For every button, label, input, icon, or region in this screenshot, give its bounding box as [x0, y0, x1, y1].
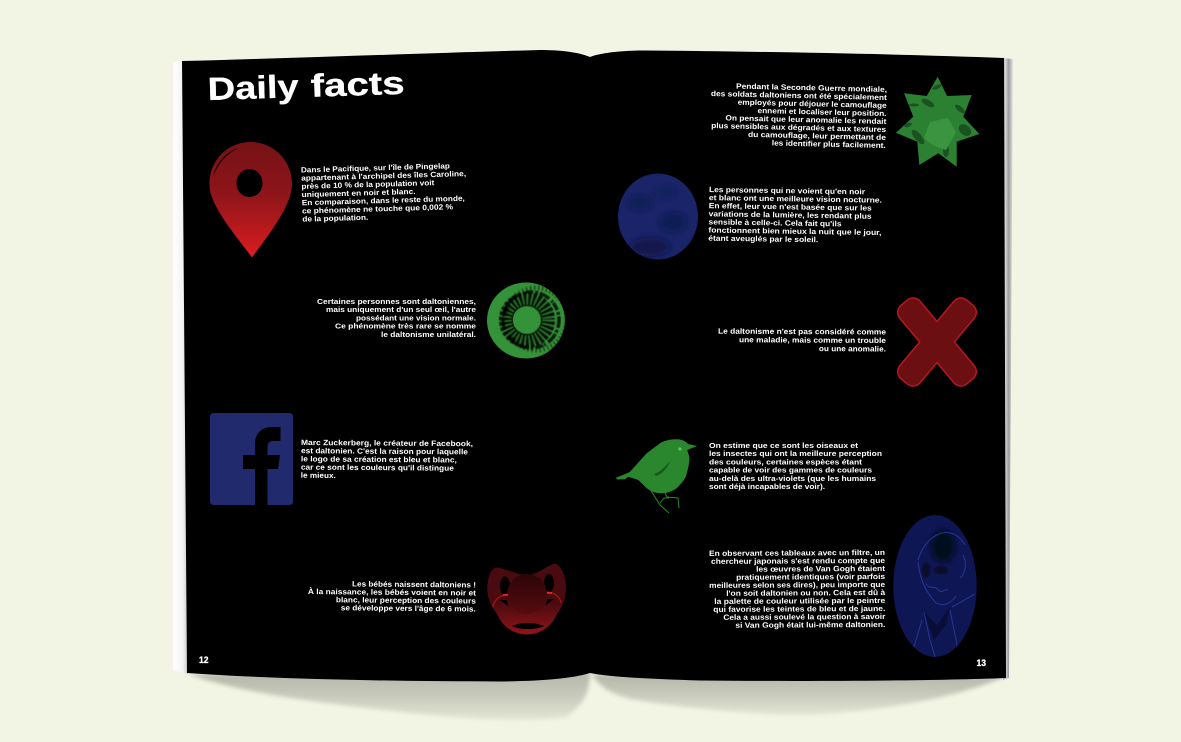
icon: blue moon [618, 174, 698, 260]
text: vision nocturne: et blanc ont une meilleure vision nocturne. [709, 193, 882, 205]
text: daltonisme unilatéral [317, 297, 476, 339]
text: camouflage: ennemi et localiser leur position. [757, 106, 887, 118]
text: Facebook: est daltonien. C'est la raison pour laquelle [301, 446, 468, 456]
text: vision nocturne: variations de la lumière, les rendant plus [709, 209, 872, 221]
text: oiseaux [709, 441, 882, 491]
icon: red cross [893, 293, 981, 391]
text: daltonisme unilatéral: Ce phénomène très rare se nomme [335, 322, 476, 331]
icon: green bird [616, 439, 697, 513]
text: bébés: blanc, leur perception des couleurs [336, 595, 476, 605]
text: oiseaux: sont déjà incapables de voir). [709, 482, 825, 491]
text: vision nocturne: Les personnes qui ne voient qu'en noir [709, 185, 865, 196]
text: Facebook: car ce sont les couleurs qu'il distingue [301, 463, 454, 473]
text: Pingelap: En comparaison, dans le reste du monde, [302, 194, 465, 207]
text: Van Gogh [709, 548, 886, 630]
text: camouflage: plus sensibles aux dégradés et aux textures [711, 121, 886, 134]
text: oiseaux: On estime que ce sont les oiseaux et [709, 441, 859, 450]
text: oiseaux: des couleurs, certaines espèces étant [709, 457, 863, 466]
text: camouflage: les identifier plus facilement. [772, 138, 886, 150]
text: Pingelap: près de 10 % de la population voit [301, 178, 435, 191]
text: Pingelap: Dans le Pacifique, sur l'île de Pingelap [301, 161, 450, 174]
text: oiseaux: capable de voir des gammes de couleurs [709, 466, 872, 475]
icon: camouflage star [896, 77, 979, 167]
text: Pingelap [301, 161, 467, 224]
title [207, 65, 405, 107]
text: camouflage: du camouflage, leur permettant de [748, 130, 886, 142]
icon: Van Gogh portrait [893, 515, 977, 660]
text: Van Gogh: Cela a aussi soulevé la question à savoir [723, 612, 885, 622]
text: maladie: Le daltonisme n'est pas considéré comme [718, 327, 886, 336]
text: bébés [308, 579, 477, 614]
text: Pingelap: ce phénomène ne touche que 0,002 % [302, 202, 453, 215]
text: daltonisme unilatéral: Certaines personnes sont daltoniennes, [317, 297, 476, 306]
text: bébés: Les bébés naissent daltoniens ! [352, 579, 476, 589]
icon: red pacifier [487, 564, 566, 634]
text: Facebook: le mieux. [301, 471, 336, 480]
text: Van Gogh: meilleures selon ses dires), peu importe que [709, 580, 885, 590]
text: bébés: se développe vers l'âge de 6 mois. [341, 603, 476, 613]
text: Pingelap: uniquement en noir et blanc. [301, 187, 416, 199]
text: Pingelap: appartenant à l'archipel des îles Caroline, [301, 169, 466, 183]
text: Facebook: Marc Zuckerberg, le créateur de Facebook, [301, 438, 473, 448]
magazine spread [171, 50, 1013, 720]
text: Van Gogh: qui favorise les teintes de bleu et de jaune. [713, 604, 885, 614]
title: Daily [207, 68, 299, 107]
text: vision nocturne: sensible à celle-ci. Cela fait qu'ils [708, 217, 842, 228]
text: vision nocturne: fonctionnent bien mieux la nuit que le jour, [708, 225, 881, 237]
text: oiseaux: les insectes qui ont la meilleure perception [709, 449, 882, 458]
text: Van Gogh: En observant ces tableaux avec un filtre, un [709, 548, 885, 558]
text: camouflage [710, 81, 888, 150]
right page [590, 50, 1006, 681]
text: vision nocturne: étant aveuglés par le soleil. [708, 234, 818, 244]
text: daltonisme unilatéral: possédant une vision normale. [356, 313, 476, 322]
text: bébés: À la naissance, les bébés voient en noir et [308, 587, 477, 598]
icon: facebook logo [210, 413, 293, 505]
text: oiseaux: au-delà des ultra-violets (que les humains [709, 474, 876, 483]
text: camouflage: des soldats daltoniens ont été spécialement [711, 89, 887, 102]
text: Van Gogh: la palette de couleur utilisée par le peintre [714, 596, 885, 606]
text: maladie: ou une anomalie. [819, 344, 886, 353]
text: vision nocturne [708, 185, 882, 245]
text: Van Gogh: si Van Gogh était lui-même daltonien. [735, 620, 885, 630]
text: camouflage: Pendant la Seconde Guerre mondiale, [736, 82, 887, 94]
text: vision nocturne: En effet, leur vue n'est basée que sur les [709, 201, 872, 213]
book shadow [188, 672, 1006, 720]
page number 12: 12 [199, 655, 208, 666]
page edges [171, 58, 1013, 680]
text: Van Gogh: l'on soit daltonien ou non. Cela est dû à [726, 588, 886, 598]
text: maladie [718, 327, 886, 353]
text: maladie: une maladie, mais comme un trouble [739, 335, 886, 345]
left page [182, 50, 590, 682]
text: Van Gogh: chercheur japonais s'est rendu compte que [711, 556, 885, 566]
icon: map pin [209, 142, 292, 258]
title: facts [310, 65, 405, 104]
text: Van Gogh: pratiquement identiques (voir parfois [736, 572, 885, 582]
text: Facebook [301, 438, 473, 481]
page number 13: 13 [976, 658, 986, 669]
text: Van Gogh: les œuvres de Van Gogh étaient [756, 564, 886, 574]
text: camouflage: On pensait que leur anomalie les rendait [725, 113, 887, 126]
icon: green eye [487, 282, 565, 358]
text: daltonisme unilatéral: mais uniquement d'un seul œil, l'autre [326, 305, 476, 314]
text: Facebook: le logo de sa création est bleu et blanc, [301, 454, 457, 464]
text: Pingelap: de la population. [302, 213, 368, 224]
text: camouflage: employés pour déjouer le camouflage [738, 98, 887, 110]
text: daltonisme unilatéral: le daltonisme unilatéral. [381, 330, 476, 339]
